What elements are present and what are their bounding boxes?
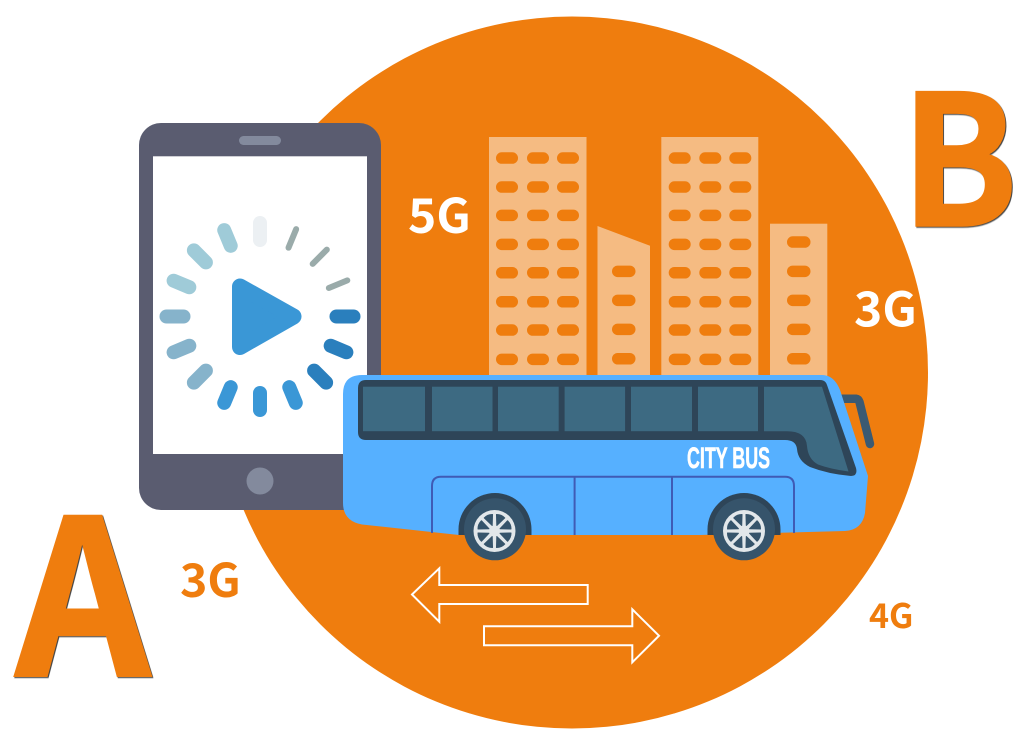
windows frame (358, 380, 856, 476)
phone speaker (239, 136, 281, 145)
label: 5G: 5G (408, 177, 471, 247)
door lines (432, 477, 794, 535)
window panes (363, 387, 848, 472)
phone home button (246, 468, 274, 494)
phone body (139, 123, 381, 510)
letter B: B (901, 16, 1017, 278)
building 1 (489, 137, 586, 377)
play icon (240, 286, 294, 347)
front wheel (458, 493, 532, 560)
arrow: left (412, 568, 588, 622)
letter A: A (15, 426, 151, 737)
building 3 (661, 137, 758, 377)
phone screen (153, 156, 367, 454)
building 2 (598, 226, 650, 377)
buildings (489, 137, 827, 377)
building 4 (770, 224, 827, 377)
arrow: right (484, 609, 659, 662)
label: 3G white: 3G (854, 270, 917, 340)
bus body (343, 375, 868, 535)
phone (139, 123, 381, 510)
rear wheel (708, 493, 780, 560)
orange circle background (216, 16, 928, 728)
mirror (838, 399, 870, 444)
bus (343, 375, 870, 560)
label: 4G: 4G (869, 589, 913, 638)
label: 3G orange: 3G (180, 544, 241, 611)
bus label: CITY BUS (687, 442, 770, 475)
loading spinner (166, 223, 354, 410)
